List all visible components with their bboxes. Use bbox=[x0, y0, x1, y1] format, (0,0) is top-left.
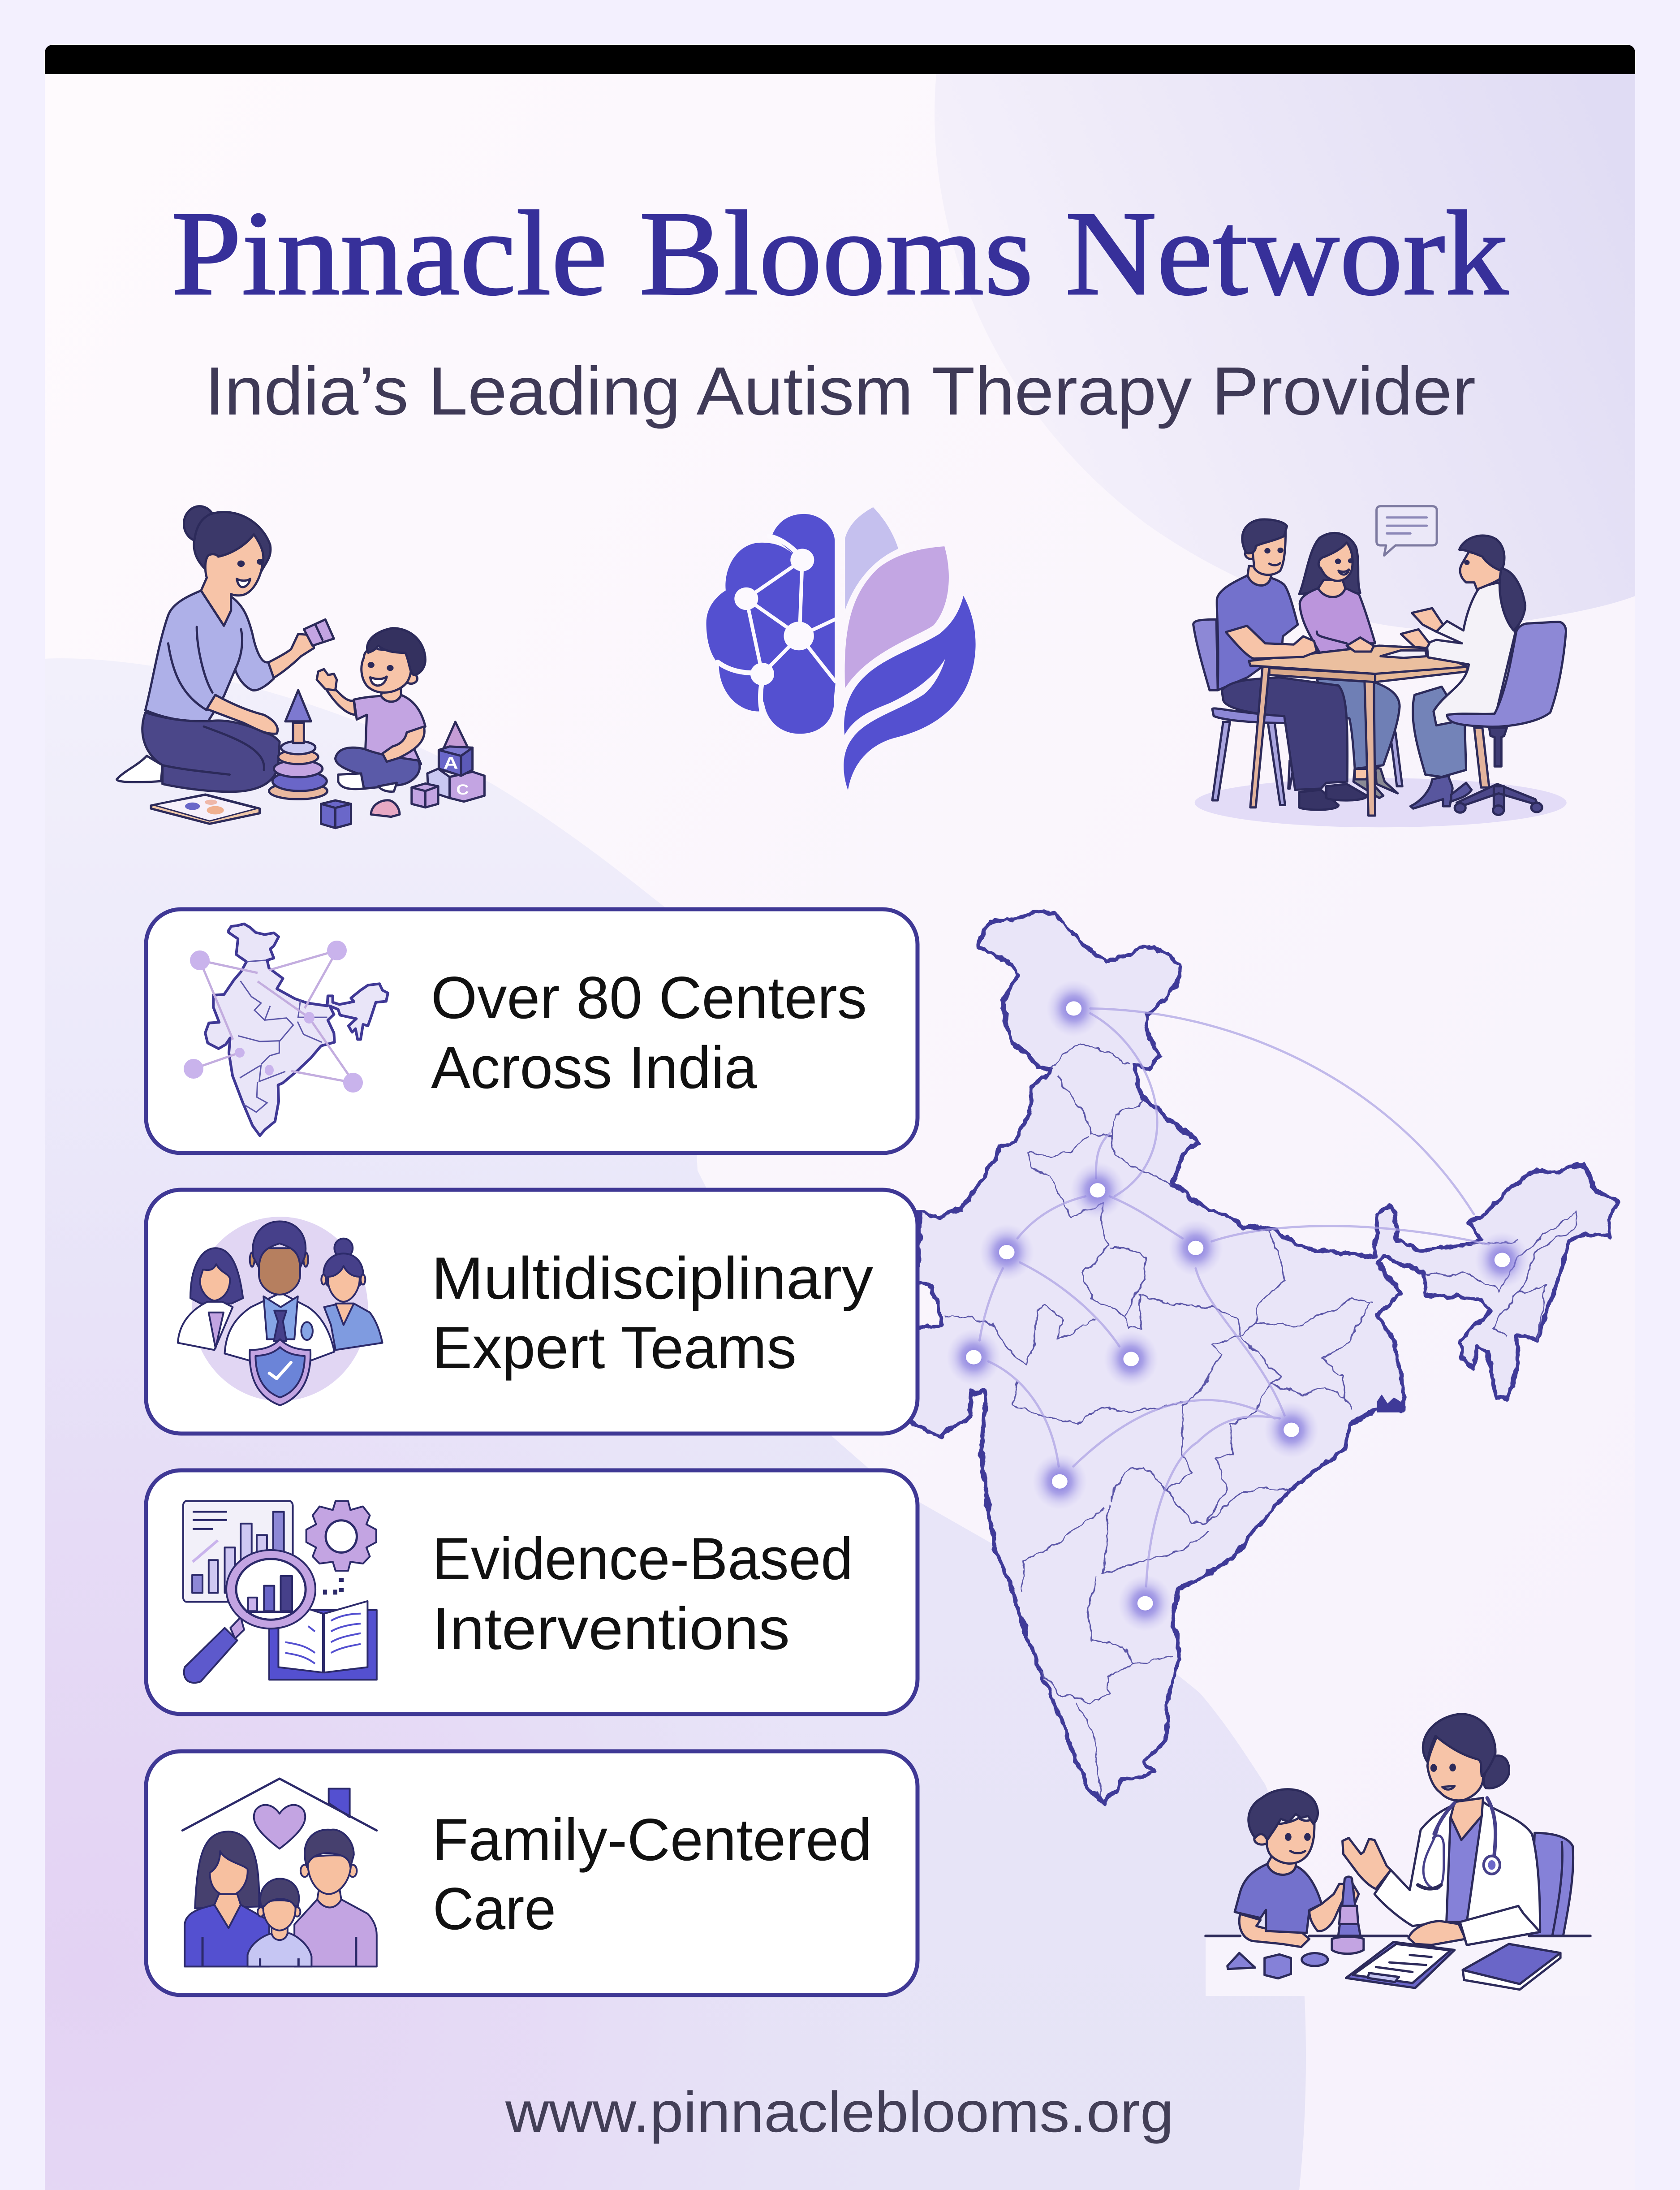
card text bbox=[432, 1526, 853, 1662]
card text: Over 80 Centers bbox=[431, 965, 867, 1031]
card text: Interventions bbox=[432, 1596, 790, 1662]
illustration: doctor with child at table bbox=[1206, 1714, 1590, 1996]
India map with connected centres bbox=[886, 911, 1617, 1802]
top black bar bbox=[45, 45, 1635, 74]
card text: Multidisciplinary bbox=[431, 1245, 874, 1312]
icon: medical team with shield bbox=[178, 1217, 383, 1405]
illustration: parents consulting with therapist bbox=[1193, 506, 1567, 827]
centre markers bbox=[947, 981, 1529, 1632]
card: family-centered care bbox=[146, 1751, 918, 1995]
card text bbox=[431, 1245, 874, 1381]
card: evidence-based interventions bbox=[146, 1470, 918, 1714]
icon: small India network map bbox=[205, 924, 388, 1136]
card text bbox=[431, 965, 867, 1101]
subtitle: India’s Leading Autism Therapy Provider bbox=[205, 353, 1476, 429]
card text bbox=[432, 1807, 872, 1942]
icon: chart, magnifier, gear and book bbox=[183, 1501, 377, 1683]
card text: Family-Centered bbox=[432, 1807, 872, 1873]
footer website: www.pinnacleblooms.org bbox=[505, 2080, 1174, 2144]
connection arcs bbox=[979, 1008, 1489, 1586]
card: over 80 centers bbox=[146, 909, 918, 1153]
map outline bbox=[886, 911, 1617, 1802]
card text: Evidence-Based bbox=[432, 1526, 853, 1592]
title: Pinnacle Blooms Network bbox=[171, 186, 1508, 320]
illustration: mother and child playing with toys bbox=[117, 506, 484, 828]
card: multidisciplinary expert teams bbox=[146, 1190, 918, 1434]
state boundaries bbox=[944, 1043, 1576, 1797]
card text: Care bbox=[433, 1876, 556, 1942]
card text: Across India bbox=[431, 1035, 757, 1101]
illustration: mother and child playing with toys: A bbox=[444, 753, 458, 773]
card text: Expert Teams bbox=[432, 1315, 797, 1381]
Sundarbans coastline detail bbox=[1377, 1395, 1404, 1412]
logo: brain and leaf bbox=[706, 507, 976, 790]
illustration: mother and child playing with toys: C bbox=[456, 781, 469, 798]
icon: family under a roof with heart bbox=[182, 1779, 377, 1966]
icon: network nodes bbox=[184, 941, 363, 1093]
